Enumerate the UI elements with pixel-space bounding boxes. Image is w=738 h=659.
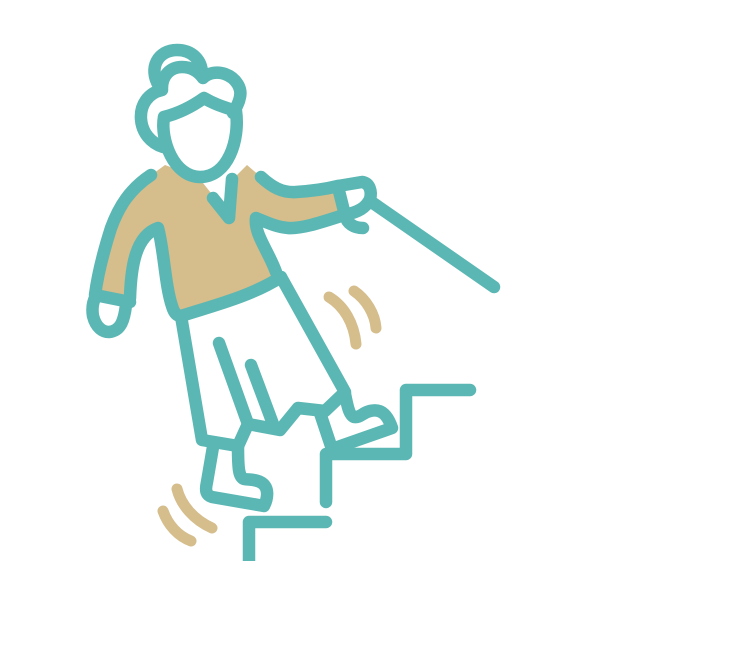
right hand — [338, 182, 371, 228]
hair bun — [154, 50, 202, 86]
right arm lower — [256, 215, 344, 272]
face — [163, 98, 237, 177]
sweater fill — [95, 165, 344, 316]
sweater neckline — [213, 179, 232, 218]
lower stair — [249, 522, 326, 561]
left hand — [92, 296, 126, 332]
motion lines bottom — [177, 489, 212, 528]
skirt pleats — [219, 343, 248, 424]
motion lines right — [329, 297, 356, 344]
hair — [141, 90, 163, 147]
left arm outer — [95, 175, 151, 302]
cane — [373, 203, 494, 287]
left foot — [206, 446, 267, 506]
waist — [181, 277, 281, 316]
left arm inner — [130, 228, 181, 316]
white mask clipping lower stair — [235, 561, 265, 575]
right arm upper — [261, 177, 338, 192]
skirt — [181, 277, 345, 446]
right foot — [320, 394, 392, 449]
upper stairs — [326, 390, 470, 502]
